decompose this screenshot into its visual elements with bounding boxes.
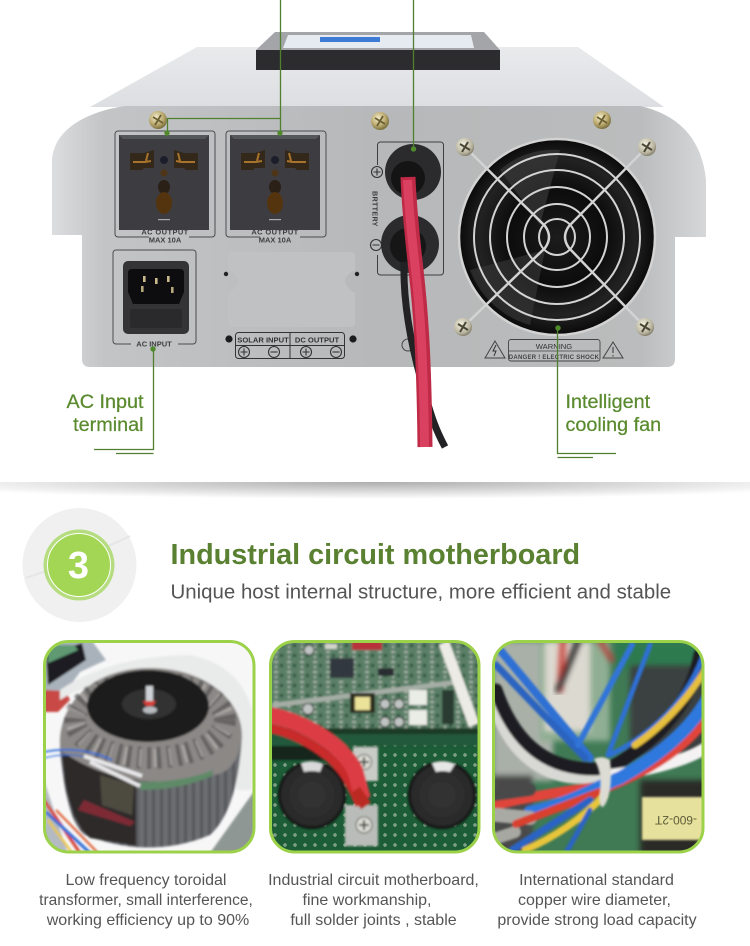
callout label: AC Input terminal: terminal <box>73 414 144 436</box>
section heading: Industrial circuit motherboard <box>170 539 580 571</box>
card: circuit motherboard photo <box>270 641 481 853</box>
caption: copper wiring: International standard <box>519 872 674 889</box>
caption: toroidal transformer: working efficiency up to 90% <box>46 912 249 929</box>
yellow transformer <box>350 693 375 713</box>
caption: toroidal transformer <box>39 872 253 929</box>
callout label: Intelligent cooling fan <box>566 391 661 436</box>
battery terminal block <box>370 142 444 351</box>
warning label: DANGER ! ELECTRIC SHOCK <box>509 355 600 361</box>
section divider shadow <box>0 482 750 498</box>
blue white lead wires <box>44 750 142 853</box>
top mounted display box <box>256 32 500 70</box>
upper control board <box>270 641 481 732</box>
caption: circuit motherboard <box>268 872 479 929</box>
section number badge <box>22 508 136 622</box>
foil upper winding <box>60 668 242 782</box>
terminal blocks <box>353 747 378 781</box>
battery cables <box>404 177 445 447</box>
card: copper wiring photo <box>493 641 710 860</box>
callout lines <box>94 0 616 458</box>
AC input inlet <box>113 250 196 348</box>
caption: copper wiring: copper wire diameter, <box>518 892 671 909</box>
AC output socket left <box>115 131 215 244</box>
warning label: WARNING <box>536 342 572 351</box>
yellow component label: -600-2T <box>654 813 697 827</box>
AC input inlet: AC INPUT <box>136 340 172 348</box>
AC output socket right: MAX 10A <box>259 236 292 244</box>
device photo: inverter rear panel <box>52 32 706 447</box>
callout label: AC Input terminal <box>67 391 144 436</box>
caption: circuit motherboard: fine workmanship, <box>303 892 431 909</box>
solar input and DC output terminal label: DC OUTPUT <box>295 336 340 344</box>
callout label: Intelligent cooling fan: Intelligent <box>566 391 651 413</box>
callout label: Intelligent cooling fan: cooling fan <box>566 414 661 436</box>
red cables <box>270 715 366 806</box>
device top surface <box>90 47 664 107</box>
white sleeved cable <box>444 643 474 725</box>
toroid dark lower band <box>60 735 242 848</box>
blank cover plate <box>224 252 359 327</box>
AC output socket right <box>226 131 326 244</box>
base plate <box>210 792 252 850</box>
callout label: AC Input terminal: AC Input <box>67 391 144 413</box>
AC output socket right: AC OUTPUT <box>251 228 299 236</box>
white insulation wrap <box>60 655 252 790</box>
caption: circuit motherboard: Industrial circuit motherboard, <box>268 872 479 889</box>
small capacitors <box>302 645 404 727</box>
yellow component label <box>642 797 704 840</box>
AC output socket left: AC OUTPUT <box>141 228 189 236</box>
section number badge: 3 <box>68 545 89 587</box>
section subheading: Unique host internal structure, more efficient and stable <box>170 580 671 604</box>
caption: toroidal transformer: Low frequency toroidal <box>66 872 226 889</box>
caption: copper wiring: provide strong load capacity <box>497 912 697 929</box>
cooling fan with wire guard <box>454 138 656 336</box>
grey cable strip <box>272 680 455 708</box>
battery terminal block: BRTTERY <box>370 191 380 227</box>
caption: copper wiring <box>497 872 697 929</box>
device front panel <box>52 106 706 367</box>
mounting screws <box>149 111 611 130</box>
warning label <box>485 340 623 361</box>
dark resistor pack <box>442 690 454 724</box>
caption: toroidal transformer: transformer, small interference, <box>39 892 253 909</box>
optocouplers <box>409 690 427 705</box>
PCB and heatsink corner <box>46 643 106 692</box>
caption: circuit motherboard: full solder joints , stable <box>290 912 457 929</box>
black capacitors <box>278 761 346 829</box>
black centre disc <box>87 670 209 742</box>
AC output socket left: MAX 10A <box>149 236 182 244</box>
card: toroidal transformer photo <box>44 641 255 860</box>
solar input and DC output terminal label: SOLAR INPUT <box>237 336 289 344</box>
solar input and DC output terminal label <box>225 332 357 358</box>
